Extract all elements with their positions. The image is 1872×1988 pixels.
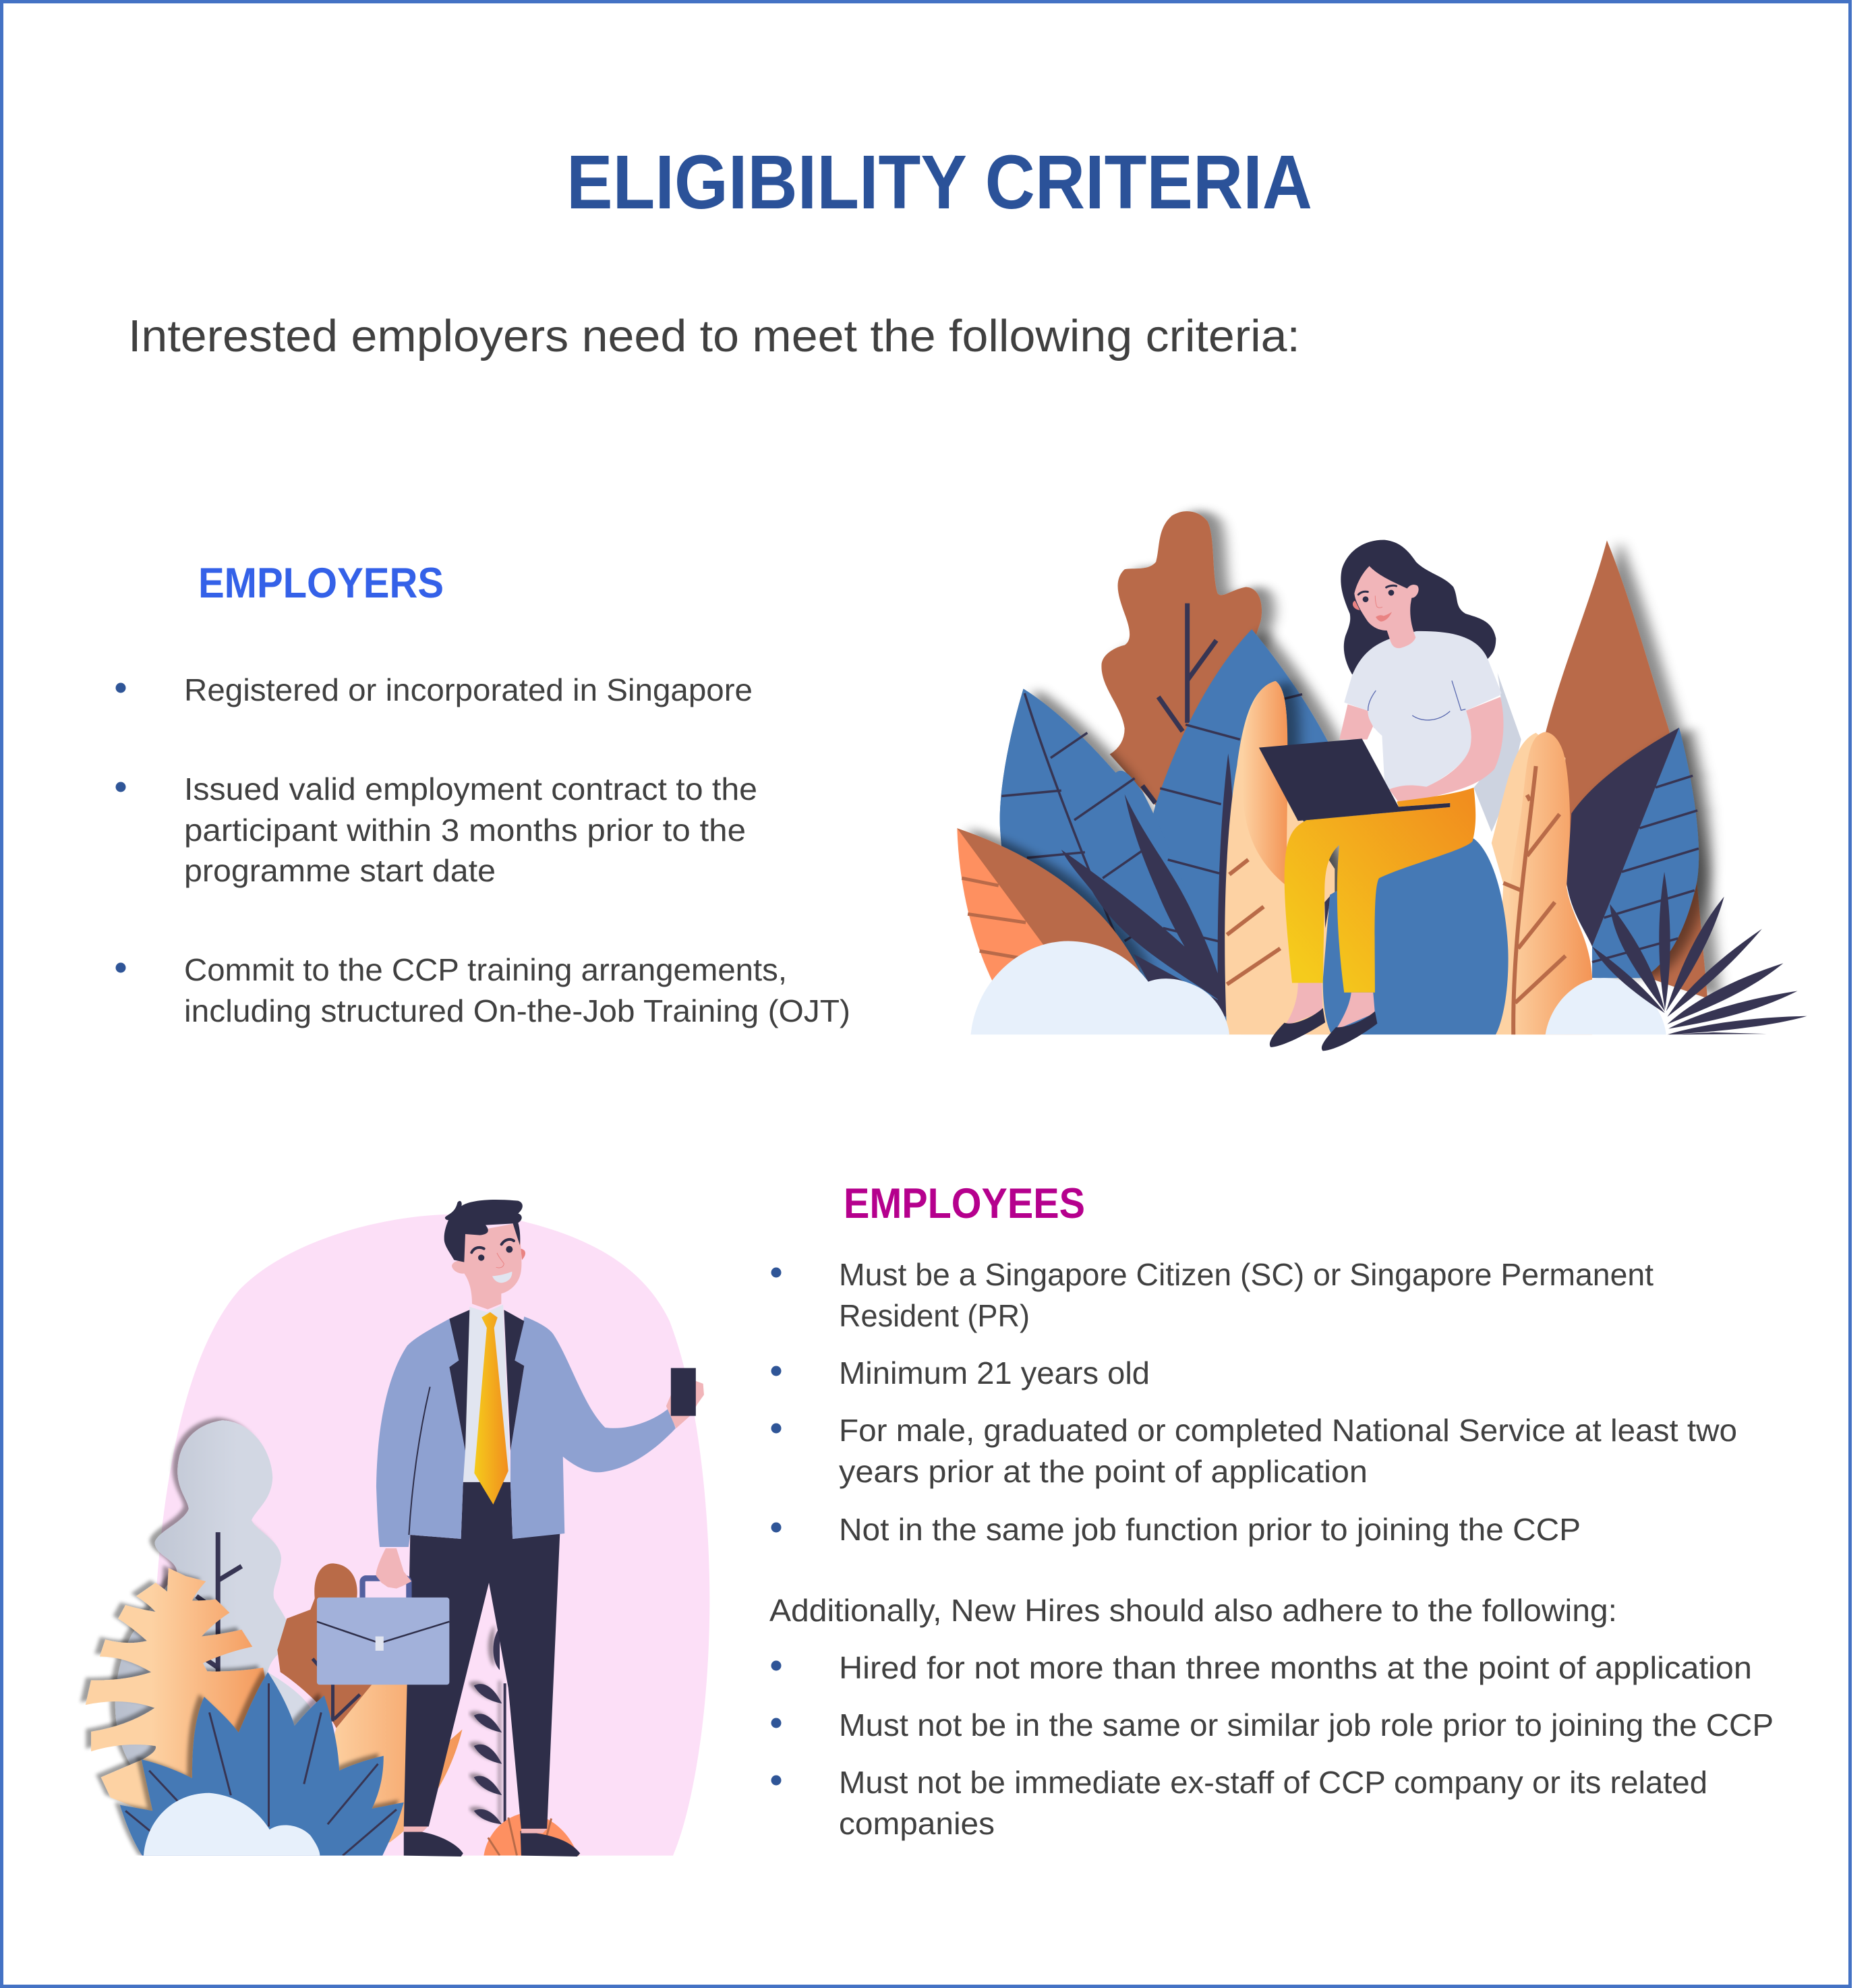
eyes <box>478 1246 513 1261</box>
heading: employees: EMPLOYEES <box>844 1180 1085 1227</box>
hand on briefcase <box>376 1548 411 1589</box>
lapels <box>449 1310 524 1451</box>
plant: dark spikes right <box>1592 872 1807 1034</box>
bush: white <box>144 1793 320 1856</box>
bullet: national service: For male, graduated or completed National Service at least two <box>839 1413 1737 1448</box>
bullet: contract: participant within 3 months prior to the <box>184 813 746 848</box>
left arm <box>1339 704 1374 740</box>
face and neck <box>1354 566 1419 648</box>
leaf shadow: wide blue over brown <box>999 686 1156 846</box>
ear <box>1353 601 1360 610</box>
tie <box>474 1312 508 1504</box>
woman body <box>1259 632 1504 1051</box>
mouth <box>1376 612 1392 622</box>
title: ELIGIBILITY CRITERIA <box>566 140 1312 225</box>
small dark plant <box>474 1627 505 1827</box>
hair <box>1341 540 1496 683</box>
illustration: man with briefcase <box>86 1215 709 1858</box>
dress shirt <box>463 1304 510 1482</box>
plant: dark spikes left <box>1061 753 1233 1017</box>
bullet: ex-staff: Must not be immediate ex-staff of CCP company or its related <box>839 1765 1707 1800</box>
laptop <box>1259 738 1450 821</box>
bullet: registered: Registered or incorporated in Singapore <box>184 672 753 707</box>
bullet: citizenship: Must be a Singapore Citizen (SC) or Singapore Permanent <box>839 1257 1654 1292</box>
leaf: peach right <box>1492 732 1592 1034</box>
intro sentence: Interested employers need to meet the following criteria: <box>128 311 1300 361</box>
bullet: training: including structured On-the-Job Training (OJT) <box>184 993 850 1028</box>
pink backdrop <box>140 1215 709 1856</box>
bullet: national service: years prior at the point of application <box>839 1454 1368 1489</box>
leaf: brown triangle <box>1545 540 1707 998</box>
bullet: training: Commit to the CCP training arrangements, <box>184 952 787 987</box>
bullet: contract: Issued valid employment contract to the <box>184 771 757 807</box>
sleeve crease <box>409 1386 430 1535</box>
leaf: orange and brown <box>957 828 1145 991</box>
plants behind <box>957 511 1807 1034</box>
brows <box>471 1239 514 1252</box>
bullet: job function: Not in the same job function prior to joining the CCP <box>839 1512 1581 1547</box>
leaf: brown oak <box>1101 511 1262 805</box>
bullet: ex-staff <box>771 1765 1707 1841</box>
panel: employers <box>116 560 850 1028</box>
man head <box>444 1200 525 1310</box>
bullet: contract <box>116 771 757 888</box>
bullet: hired: Hired for not more than three months at the point of application <box>839 1650 1752 1685</box>
leaf: dark and blue right <box>1567 728 1699 978</box>
man body <box>317 1304 704 1857</box>
smile <box>492 1272 512 1283</box>
ankles <box>404 1827 547 1833</box>
briefcase <box>317 1578 449 1685</box>
leaf: orange <box>326 1681 463 1856</box>
right arm <box>1389 697 1504 802</box>
bullet: citizenship: Resident (PR) <box>839 1298 1030 1333</box>
bullet: training <box>116 952 850 1028</box>
bullet: job role: Must not be in the same or similar job role prior to joining the CCP <box>839 1707 1774 1743</box>
bullet: contract: programme start date <box>184 853 496 888</box>
bush: white right <box>1546 978 1666 1034</box>
jacket <box>376 1316 676 1547</box>
hair <box>444 1200 523 1262</box>
leaf: peach centre <box>1225 681 1335 1034</box>
eyes <box>1363 590 1394 602</box>
small dark sliver behind knee <box>1324 896 1330 928</box>
shadow strip behind torso <box>1473 673 1521 832</box>
brows <box>1358 585 1397 595</box>
bush: white left <box>970 941 1229 1034</box>
bullet: age: Minimum 21 years old <box>839 1355 1150 1391</box>
new hires intro: Additionally, New Hires should also adhere to the following: <box>769 1593 1617 1628</box>
shoes <box>404 1831 580 1857</box>
leaf: tall blue <box>1140 629 1328 1024</box>
shirt seams <box>1368 680 1465 720</box>
bullet: citizenship <box>771 1257 1654 1333</box>
leaf: brown behind briefcase <box>277 1563 377 1728</box>
shoes <box>1270 1008 1377 1051</box>
heading: employers: EMPLOYERS <box>198 560 444 607</box>
ear <box>521 1249 525 1260</box>
leaf: orange ball <box>484 1813 579 1856</box>
leaf: blue palm <box>120 1672 404 1858</box>
neck and face <box>452 1223 521 1310</box>
phone hand <box>666 1379 704 1428</box>
leaf: grey <box>115 1420 310 1786</box>
woman head <box>1341 540 1502 728</box>
plants <box>86 1420 579 1858</box>
phone <box>671 1368 696 1416</box>
nose <box>1375 595 1382 608</box>
nose <box>496 1253 504 1268</box>
bullet: national service <box>771 1413 1737 1489</box>
shirt collar area <box>1344 631 1502 728</box>
leaf: wide blue <box>999 689 1153 846</box>
legs <box>1285 983 1375 1030</box>
trousers <box>1285 788 1475 993</box>
seat: blue rock <box>1323 839 1509 1034</box>
bullet: ex-staff: companies <box>839 1806 995 1841</box>
t-shirt <box>1345 632 1500 791</box>
leaf veins: blue leaves <box>1001 693 1302 942</box>
panel: employees <box>769 1180 1774 1841</box>
trousers <box>404 1482 560 1829</box>
leaf: monstera <box>86 1568 274 1813</box>
illustration: woman with laptop among leaves <box>957 511 1807 1051</box>
